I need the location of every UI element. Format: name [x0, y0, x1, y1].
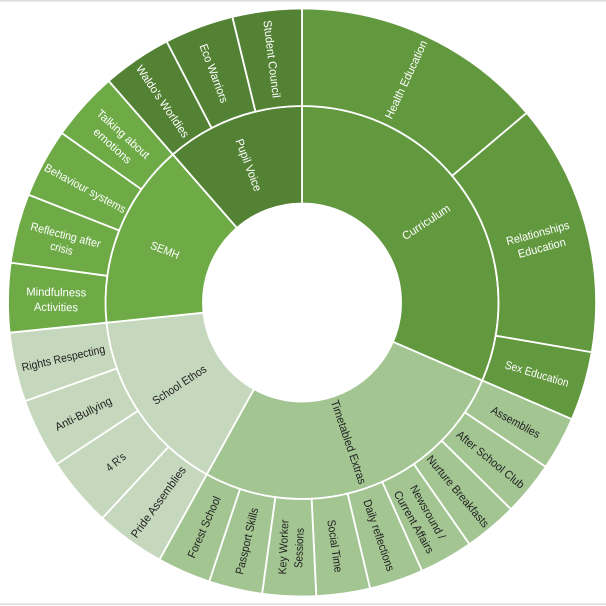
leaf: Assemblies: Assemblies	[489, 405, 542, 441]
leaf: Anti-Bullying	[25, 368, 138, 464]
leaf: Pride Assemblies: Pride Assemblies	[129, 464, 189, 541]
leaf: Eco Warriors: Eco Warriors	[197, 43, 230, 105]
leaf: Health Education: Health Education	[384, 39, 430, 121]
leaf: Talking about emotions: emotions	[91, 126, 134, 167]
leaf: Rights Respecting	[10, 323, 117, 401]
leaf: After School Club: After School Club	[454, 429, 526, 492]
inner ring: School Ethos: School Ethos	[151, 363, 209, 408]
inner ring: Pupil Voice	[173, 106, 302, 228]
leaf: Newsround / Current Affairs: Current Affairs	[391, 489, 436, 556]
inner ring: Curriculum: Curriculum	[400, 203, 453, 243]
leaf: Relationships Education: Education	[517, 237, 567, 261]
leaf: Mindfulness Activities	[8, 263, 107, 333]
leaf: Eco Warriors	[167, 17, 256, 128]
leaf: Health Education	[302, 8, 527, 176]
leaf: Waldo's Worldies	[109, 42, 212, 154]
leaf: Behaviour systems: Behaviour systems	[42, 162, 128, 216]
inner ring: School Ethos	[106, 313, 254, 474]
leaf: Waldo's Worldies: Waldo's Worldies	[133, 63, 191, 141]
leaf: Key Worker Sessions: Sessions	[293, 528, 307, 568]
leaf: Nurture Breakfasts: Nurture Breakfasts	[424, 454, 491, 530]
leaf: Passport Skills	[209, 489, 275, 594]
leaf: Passport Skills: Passport Skills	[234, 507, 261, 576]
leaf: Key Worker Sessions	[262, 497, 316, 596]
segment: Timetabled Extras	[160, 342, 572, 596]
leaf: 4 R's: 4 R's	[104, 451, 129, 474]
inner ring: Timetabled Extras: Timetabled Extras	[328, 399, 368, 486]
leaf: Student Council: Student Council	[260, 20, 282, 99]
leaf: Social Time	[312, 494, 370, 596]
inner ring: Pupil Voice: Pupil Voice	[232, 137, 263, 193]
leaf: Sex Education: Sex Education	[503, 359, 570, 390]
leaf: Student Council	[232, 8, 302, 112]
leaf: After School Club	[442, 412, 546, 509]
segment: Pupil Voice	[109, 8, 302, 228]
leaf: Mindfulness Activities: Activities	[34, 302, 78, 314]
leaf: Behaviour systems	[28, 133, 141, 230]
leaf: Relationships Education	[452, 113, 596, 352]
leaf: Daily reflections	[348, 482, 422, 588]
leaf: Mindfulness Activities: Mindfulness	[26, 286, 87, 300]
inner ring: SEMH: SEMH	[148, 240, 181, 262]
inner ring: SEMH	[105, 154, 237, 323]
leaf: Pride Assemblies	[102, 447, 207, 560]
leaf: Key Worker Sessions: Key Worker	[277, 519, 291, 575]
leaf: Sex Education	[482, 336, 592, 419]
leaf: Anti-Bullying: Anti-Bullying	[53, 395, 114, 434]
inner ring: Timetabled Extras	[207, 342, 482, 499]
segment: SEMH	[8, 81, 237, 333]
inner ring: Curriculum	[302, 106, 498, 380]
segment: School Ethos	[10, 313, 254, 560]
leaf: Rights Respecting: Rights Respecting	[21, 344, 106, 374]
leaf: Talking about emotions	[62, 81, 173, 189]
leaf: Reflecting after crisis	[11, 195, 119, 276]
leaf: Talking about emotions: Talking about	[94, 108, 152, 162]
leaf: Reflecting after crisis: crisis	[49, 241, 74, 258]
leaf: Nurture Breakfasts	[414, 441, 511, 544]
leaf: Newsround / Current Affairs: Newsround /	[407, 483, 447, 542]
leaf: 4 R's	[57, 411, 168, 518]
leaf: Newsround / Current Affairs	[382, 464, 469, 571]
segment: Curriculum	[302, 8, 596, 419]
leaf: Relationships Education: Relationships	[505, 220, 571, 248]
leaf: Forest School	[160, 474, 240, 582]
leaf: Daily reflections: Daily reflections	[360, 498, 396, 573]
leaf: Assemblies	[465, 380, 572, 467]
leaf: Social Time: Social Time	[324, 519, 344, 573]
leaf: Reflecting after crisis: Reflecting after	[29, 221, 102, 251]
leaf: Forest School: Forest School	[186, 495, 224, 560]
